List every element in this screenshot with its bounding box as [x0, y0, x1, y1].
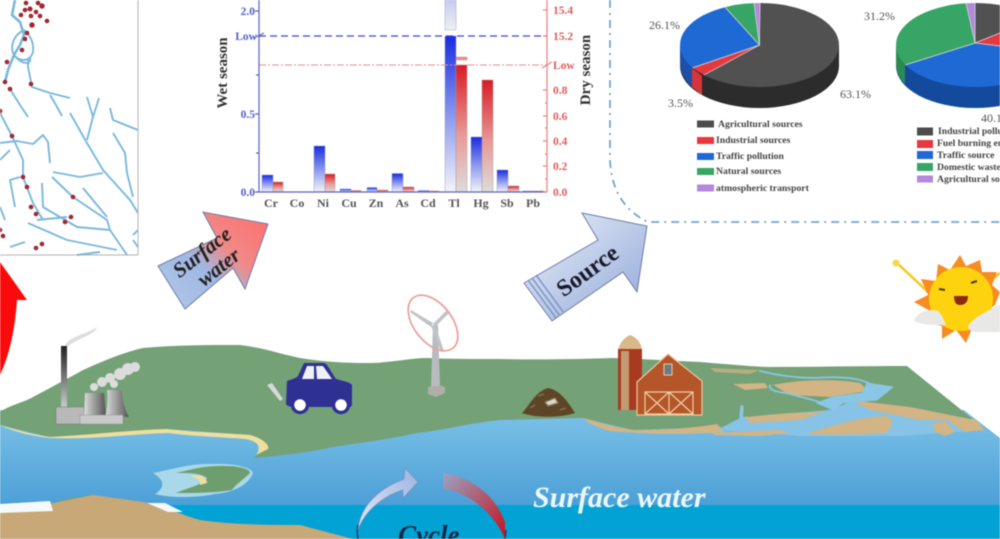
- pie percentages: [649, 18, 871, 110]
- legend left: atmospheric transport: [716, 183, 810, 194]
- legend left: Agricultural sources: [718, 119, 803, 130]
- element labels: Zn: [369, 196, 384, 210]
- legend right: Traffic source: [937, 150, 995, 161]
- arrow label: surface water: water: [192, 242, 245, 291]
- icon: wind turbine: [398, 286, 468, 397]
- cycle arrows: [357, 468, 506, 539]
- sun rays: [914, 255, 1000, 343]
- axes: [254, 0, 552, 192]
- left axis labels: [235, 6, 258, 199]
- cycle ring: [357, 525, 506, 539]
- barn doors: [645, 392, 693, 414]
- legend left: Natural sources: [716, 166, 781, 177]
- sun face: [929, 267, 993, 331]
- barn window: [664, 364, 672, 375]
- low lines: [259, 36, 547, 65]
- arrow label: surface water: Surface: [168, 222, 236, 282]
- legend left: Traffic pollution: [716, 151, 785, 162]
- sandy shoreline: [583, 418, 725, 434]
- plant building: [56, 407, 84, 424]
- arrow: red upward left: [0, 262, 27, 375]
- right axis labels: [553, 5, 575, 199]
- pie chart: sources left: [649, 0, 871, 194]
- element labels: As: [395, 196, 409, 210]
- pie side: [896, 45, 1000, 108]
- right axis labels: 0.2: [553, 161, 568, 173]
- beach: [0, 425, 268, 455]
- icon: power plant: [56, 327, 140, 424]
- delta sand patches: [710, 368, 985, 436]
- left axis labels: Low: [235, 31, 258, 43]
- chimney: [61, 346, 67, 408]
- exhaust: [267, 383, 283, 401]
- bars: wet season: [262, 0, 534, 192]
- right axis labels: 0.8: [553, 85, 568, 97]
- icon: manure pile: [522, 388, 575, 417]
- pie chart: sources right: [864, 0, 1000, 185]
- river map panel: [0, 0, 138, 255]
- pie percentages: [864, 9, 1000, 125]
- bar chart: wet and dry season: [215, 0, 594, 210]
- label: surface water: Surface water: [533, 481, 706, 514]
- river network: [0, 0, 138, 255]
- cycle arrow: red: [443, 473, 505, 539]
- arrow: source: [524, 213, 647, 321]
- legend right: Domestic waste: [937, 162, 1000, 173]
- sampling points: [0, 1, 75, 250]
- right axis labels: Low: [553, 60, 575, 72]
- legend left: Industrial sources: [716, 135, 791, 146]
- element labels: Pb: [526, 196, 540, 210]
- right axis labels: 0.0: [553, 187, 568, 199]
- cycle arrow: blue: [358, 468, 418, 530]
- wheels: [292, 398, 348, 412]
- left axis labels: 0.0: [241, 187, 255, 199]
- dashed source panel border: [610, 0, 1000, 222]
- icon: barn: [637, 354, 702, 415]
- base: [428, 384, 445, 397]
- car windows: [302, 366, 332, 379]
- water body: [0, 410, 1000, 539]
- pie side: [680, 45, 839, 108]
- pie percentages: 26.1%: [649, 18, 680, 32]
- axis title: dry season: Dry season: [578, 34, 594, 105]
- car body: [286, 363, 352, 407]
- left axis labels: 2.0: [241, 6, 255, 18]
- arrow: surface water: [158, 212, 268, 309]
- pie percentages: 3.5%: [668, 96, 693, 110]
- right axis labels: 0.6: [553, 111, 568, 123]
- white land backing right: [907, 366, 1000, 438]
- delta river channels: [741, 371, 893, 418]
- delta green bank: [746, 402, 825, 417]
- element labels: Ni: [317, 196, 330, 210]
- bars: dry season: [273, 57, 544, 192]
- right axis labels: 15.2: [553, 31, 573, 43]
- element labels: Cr: [264, 196, 279, 210]
- element labels: Co: [290, 196, 304, 210]
- arrow label: source: Source: [552, 240, 624, 302]
- pollution ring: [398, 286, 468, 360]
- sun arm: [897, 263, 1000, 292]
- right axis labels: 0.4: [553, 136, 568, 148]
- legend left: [697, 119, 810, 194]
- tower: [431, 325, 440, 386]
- sand foreground: [0, 495, 353, 539]
- icon: car: [267, 363, 352, 412]
- left axis labels: 0.5: [241, 109, 255, 121]
- eyes: [939, 281, 977, 290]
- island: [153, 464, 253, 497]
- icon: smiling sun: [892, 255, 1000, 343]
- blades: [410, 310, 450, 352]
- pie percentages: 31.2%: [864, 9, 895, 23]
- clouds: [914, 305, 1000, 332]
- turbine hall: [80, 415, 123, 424]
- landscape: [0, 345, 1000, 458]
- pie top: [679, 2, 840, 88]
- land: [0, 345, 985, 458]
- element labels: Hg: [473, 196, 489, 210]
- pie top: [895, 2, 1000, 88]
- barn body: [637, 354, 702, 415]
- right axis labels: 15.4: [553, 5, 573, 17]
- element labels: Tl: [448, 196, 460, 210]
- chimney smoke: [65, 327, 97, 347]
- mouth: [954, 296, 968, 305]
- icon: silo: [618, 335, 642, 410]
- element labels: Sb: [500, 196, 514, 210]
- element labels: [264, 196, 540, 210]
- legend right: [917, 126, 1000, 185]
- axis title: wet season: Wet season: [215, 37, 231, 109]
- element labels: Cu: [341, 196, 357, 210]
- cooling towers: [84, 393, 106, 416]
- element labels: Cd: [420, 196, 436, 210]
- pie percentages: 63.1%: [840, 87, 871, 101]
- delta shallow water: [717, 402, 985, 436]
- cooling tower steam: [90, 362, 140, 391]
